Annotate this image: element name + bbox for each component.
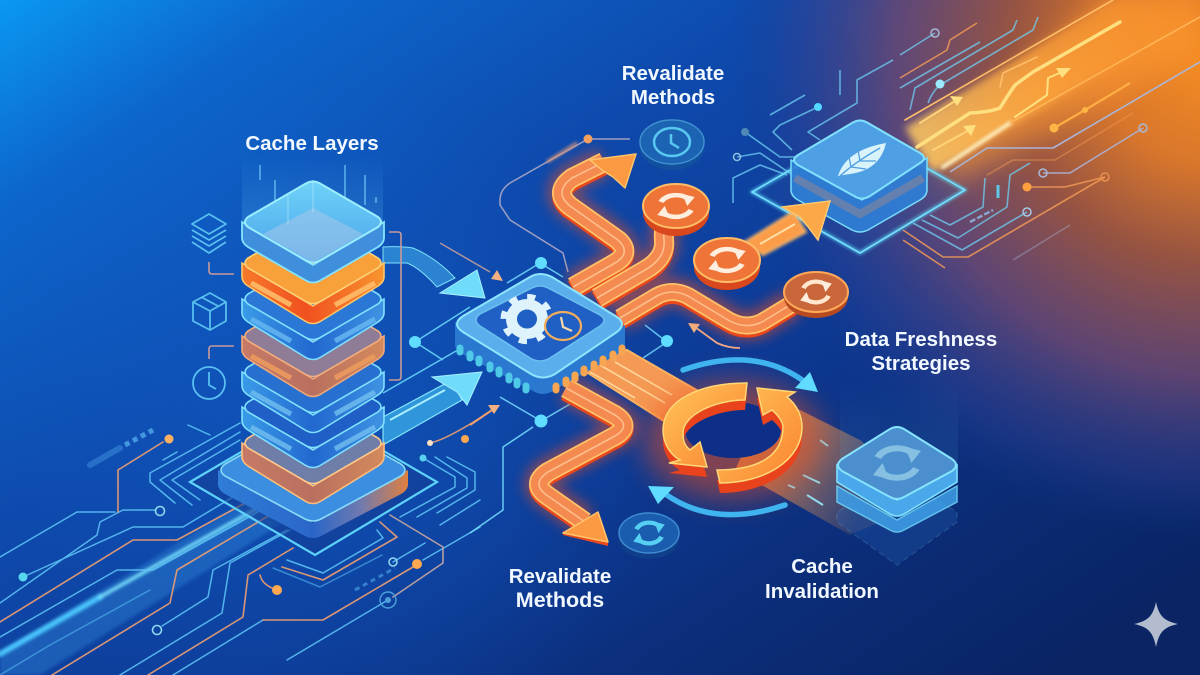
ring arrow two — [717, 388, 802, 483]
layer 6 — [242, 366, 384, 468]
blue arrow, base to chip — [383, 372, 482, 445]
ring extrusion — [663, 393, 802, 493]
leaf block — [752, 120, 965, 253]
layer 1 glass top — [242, 180, 384, 282]
circuit traces around the chip — [383, 139, 740, 533]
layer 5 — [242, 332, 384, 432]
orange band into the cache invalidation block — [735, 395, 930, 535]
chip body — [455, 322, 625, 394]
clock icon — [545, 312, 581, 340]
layer 2 — [242, 222, 384, 324]
blue swoosh arrow, top — [683, 360, 818, 392]
leaf icon — [838, 143, 886, 178]
badge: middle sync — [694, 238, 760, 290]
gear icon — [504, 297, 550, 341]
label: Cache Invalidation: Cache — [791, 555, 853, 578]
circular refresh ring — [643, 380, 823, 500]
chip inset face — [476, 286, 604, 361]
orange data beam, top right — [905, 0, 1200, 172]
chip pins — [460, 348, 622, 390]
chip connection nodes — [409, 257, 673, 428]
side icons: layers, box, clock with connectors — [192, 214, 401, 399]
pipe: top revalidate arrow — [562, 154, 636, 290]
icon: sparkle watermark — [1134, 602, 1178, 647]
block sides — [791, 158, 927, 232]
badge: upper sync — [643, 184, 709, 236]
cache layers stack — [190, 155, 437, 555]
lower glass layer — [837, 486, 957, 532]
block top — [794, 120, 924, 198]
label: Revalidate Methods, bottom: Methods — [516, 588, 604, 612]
layer 4 — [242, 296, 384, 396]
icon: box — [193, 293, 226, 330]
base platform — [190, 410, 437, 555]
label: Cache Invalidation: Invalidation — [765, 580, 879, 603]
layer 7 — [242, 402, 384, 504]
label: Data Freshness Strategies: Data Freshness — [845, 328, 997, 351]
small orange pointer arrows — [488, 270, 700, 414]
circuit nodes, top right — [734, 29, 1147, 216]
wide orange band from chip to ring — [580, 350, 700, 428]
frame outline — [752, 130, 965, 253]
icon: layers — [192, 214, 226, 253]
cache invalidation block — [837, 380, 958, 565]
label: Revalidate Methods, bottom: Revalidate — [509, 565, 611, 588]
label: Cache Layers: Cache Layers — [245, 132, 379, 155]
label: Revalidate Methods, top: Revalidate — [622, 62, 724, 85]
badge: right sync — [784, 272, 848, 318]
sync badges, orange — [643, 184, 848, 318]
blue swoosh arrow, bottom — [648, 486, 785, 515]
arrow to leaf block — [745, 201, 830, 255]
ring arrow one — [663, 383, 747, 467]
circuit nodes, bottom left — [18, 434, 469, 634]
connector brackets — [209, 232, 401, 380]
layer 3 — [242, 258, 384, 360]
circuit traces, top right — [733, 17, 1200, 268]
pipe: bottom revalidate arrow — [539, 388, 624, 546]
pipe: to sync badge three — [620, 292, 795, 329]
icon: clock — [193, 367, 225, 399]
circuit traces and light streams, bottom left — [0, 418, 480, 675]
light pillar above stack — [242, 155, 383, 225]
pipe: to sync badge one — [597, 215, 668, 301]
sync badge, bottom — [619, 513, 679, 559]
orange node on loop — [584, 134, 592, 144]
clock badge, top — [640, 120, 704, 170]
dashed ghost layer — [837, 476, 957, 565]
label: Data Freshness Strategies: Strategies — [871, 352, 971, 375]
orange flow pipes — [539, 154, 795, 546]
label: Revalidate Methods, top: Methods — [631, 86, 715, 109]
blue arrow, stack to chip — [383, 247, 485, 298]
light pillars — [840, 380, 958, 470]
sync icon on block — [873, 447, 921, 479]
processor chip with gear and clock — [455, 274, 625, 394]
upper glass layer — [837, 427, 957, 516]
